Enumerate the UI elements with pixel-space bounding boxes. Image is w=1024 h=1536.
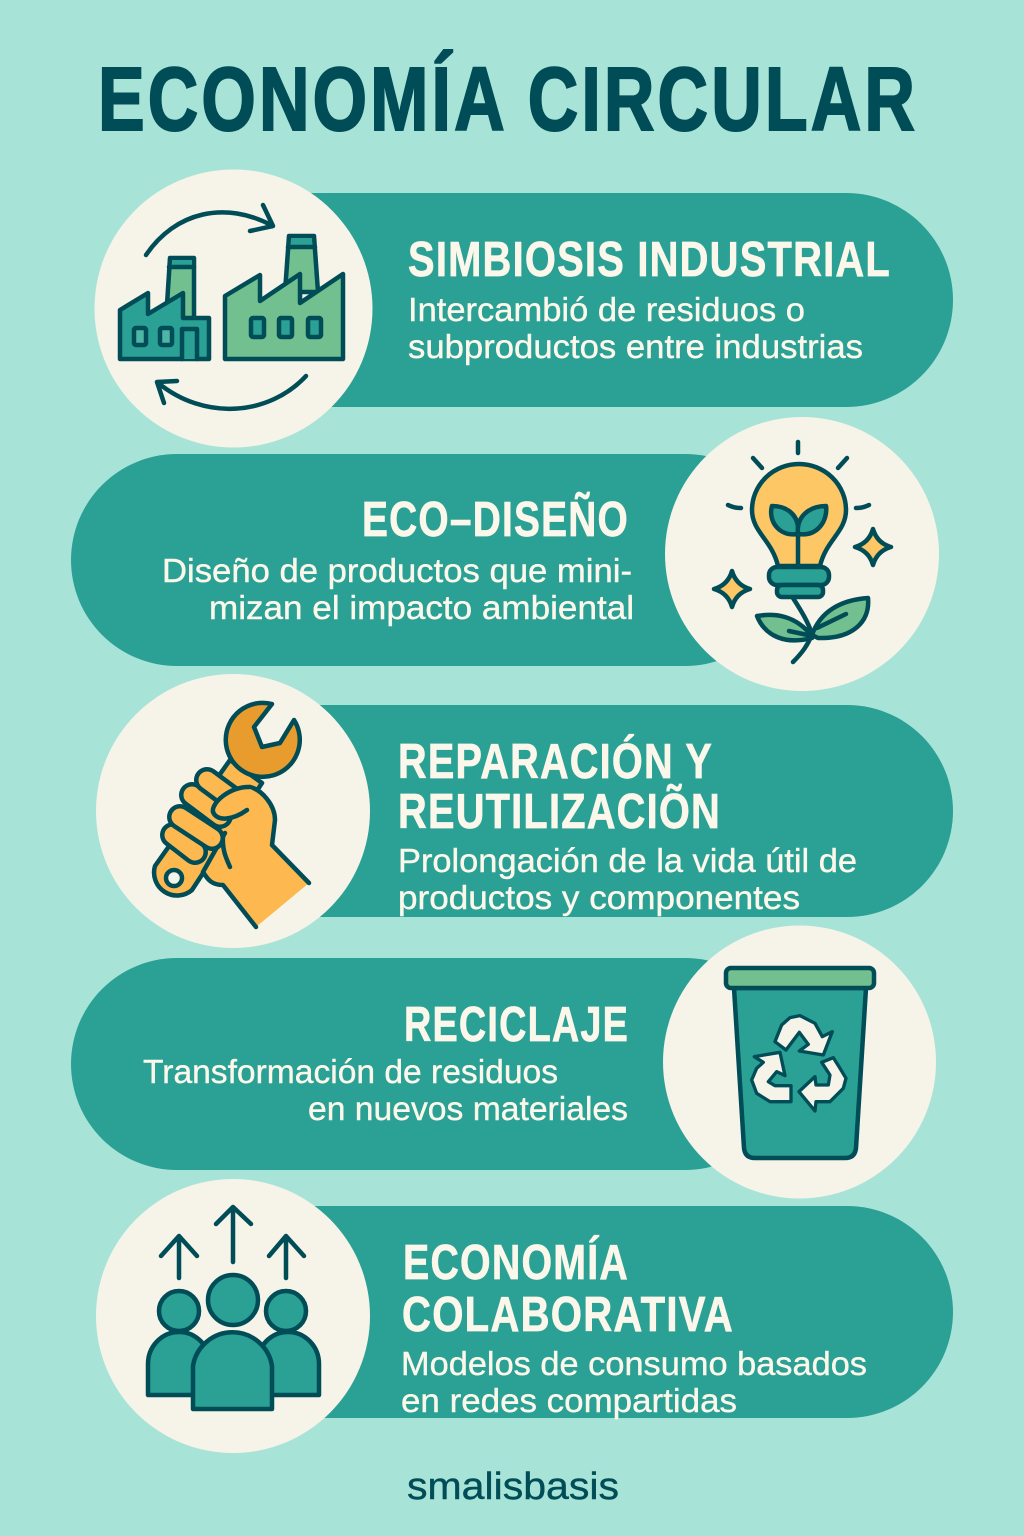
heading: ECO–DISEÑO: [362, 493, 629, 547]
heading: RECICLAJE: [404, 998, 629, 1052]
description: productos y componentes: [398, 879, 800, 916]
icon: light bulb with plant: [665, 417, 939, 691]
panel band: [200, 1206, 953, 1418]
heading: ECONOMÍA: [403, 1236, 629, 1290]
description: [401, 1345, 867, 1419]
heading: SIMBIOSIS INDUSTRIAL: [408, 233, 891, 287]
description: [398, 842, 857, 916]
panel: simbiosis industrial: [94, 170, 953, 448]
footer brand: smalisbasis: [407, 1466, 619, 1508]
heading: [402, 1236, 734, 1342]
panel band: [71, 454, 791, 666]
heading: REUTILIZACIÕN: [398, 785, 721, 839]
description: subproductos entre industrias: [408, 328, 863, 365]
heading: [398, 734, 721, 839]
description: Transformación de residuos: [143, 1053, 558, 1090]
panel: eco-diseño: [71, 417, 939, 691]
heading: REPARACIÓN Y: [398, 734, 713, 789]
panel: economía colaborativa: [96, 1179, 953, 1453]
description: mizan el impacto ambiental: [209, 589, 634, 626]
panel band: [200, 193, 953, 407]
description: Modelos de consumo basados: [401, 1345, 867, 1382]
description: en redes compartidas: [401, 1382, 737, 1419]
description: Intercambió de residuos o: [408, 291, 805, 328]
description: en nuevos materiales: [308, 1090, 628, 1127]
panel band: [71, 958, 791, 1170]
panel band: [200, 705, 953, 917]
panel: reparación y reutilización: [96, 674, 953, 948]
description: [408, 291, 863, 365]
description: Prolongación de la vida útil de: [398, 842, 857, 879]
description: [162, 552, 634, 626]
icon: factories with cycle arrows: [94, 170, 372, 448]
icon: group of people with up arrows: [96, 1179, 370, 1453]
icon: recycling bin: [663, 926, 936, 1198]
heading: COLABORATIVA: [402, 1288, 734, 1342]
description: [143, 1053, 628, 1127]
icon: hand holding wrench: [96, 674, 370, 948]
description: Diseño de productos que mini-: [162, 552, 632, 589]
panel: reciclaje: [71, 926, 936, 1198]
